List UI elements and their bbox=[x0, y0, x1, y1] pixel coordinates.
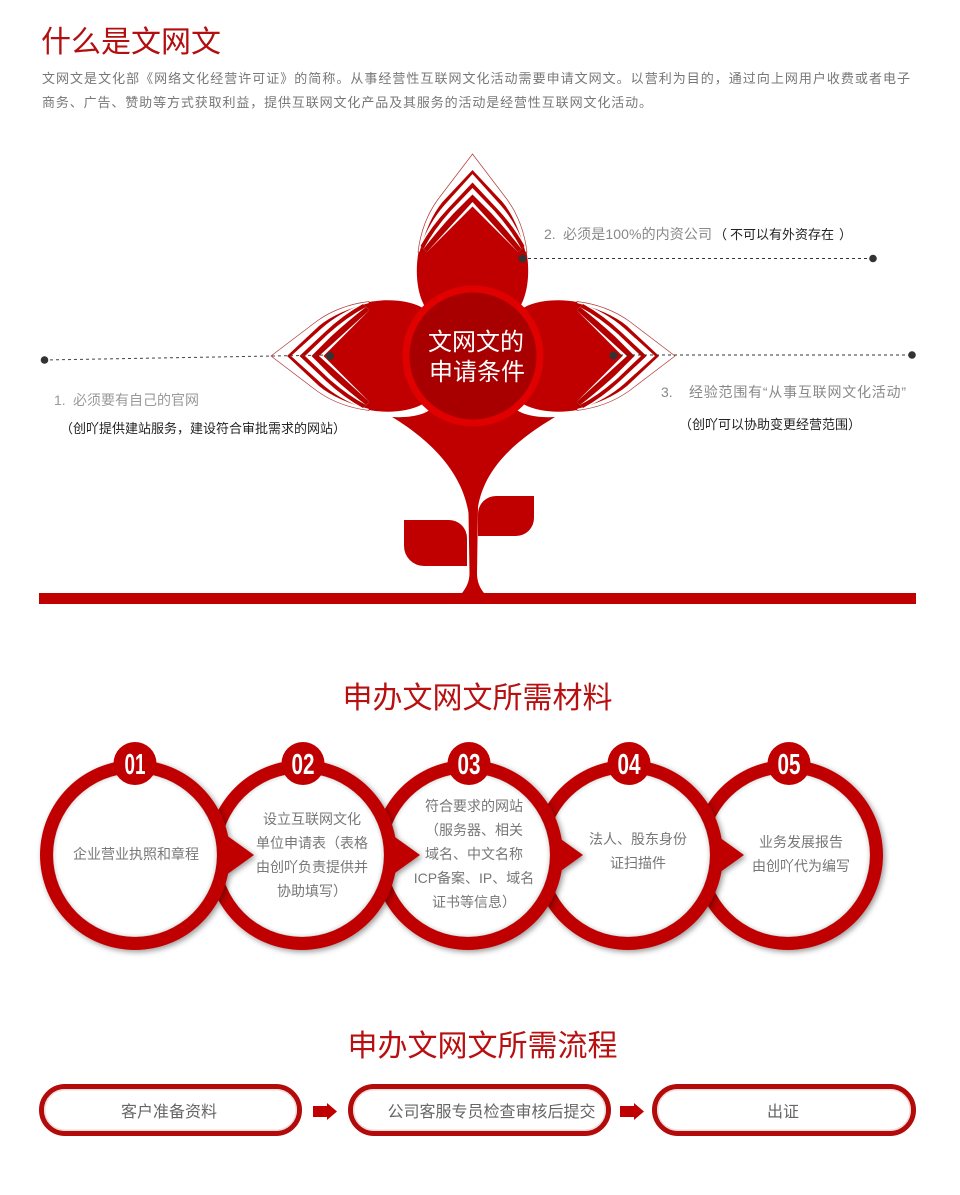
circle 05: 业务发展报告 bbox=[759, 834, 843, 850]
right petal bbox=[473, 300, 675, 412]
condition 2 text: 必须是100%的内资公司 bbox=[563, 226, 712, 242]
process step 1 bbox=[42, 1086, 300, 1134]
condition 1 text bbox=[54, 392, 346, 436]
circle 02: 由创吖负责提供并 bbox=[256, 859, 368, 875]
circle 04: 法人、股东身份 bbox=[589, 831, 687, 847]
process step 2: 公司客服专员检查审核后提交 bbox=[387, 1103, 596, 1121]
circle 01 bbox=[40, 742, 254, 950]
process step 1: 客户准备资料 bbox=[121, 1103, 217, 1121]
ground bar bbox=[39, 593, 916, 604]
condition 1 text: 1. bbox=[54, 392, 66, 408]
circle 05 bbox=[693, 742, 883, 950]
left petal bbox=[271, 300, 473, 412]
condition 1 text: （创吖提供建站服务，建设符合审批需求的网站） bbox=[60, 421, 346, 436]
condition 2 text bbox=[544, 226, 852, 242]
circle 01: 01 bbox=[124, 749, 146, 781]
circle 02: 设立互联网文化 bbox=[263, 811, 361, 827]
condition 3 text bbox=[661, 384, 906, 432]
condition 3 text: （创吖可以协助变更经营范围） bbox=[679, 417, 861, 432]
circle 04: 证扫描件 bbox=[610, 855, 666, 871]
callout 1 line bbox=[41, 352, 334, 364]
leaf right bbox=[478, 496, 534, 536]
circle 04 bbox=[533, 742, 744, 950]
condition 3 text: 经验范围有“从事互联网文化活动” bbox=[689, 384, 906, 400]
circle 05: 由创吖代为编写 bbox=[752, 858, 850, 874]
center circle: 申请条件 bbox=[429, 359, 525, 386]
circle 02: 协助填写） bbox=[277, 883, 347, 899]
center circle: 文网文的 bbox=[428, 329, 524, 356]
top petal bbox=[417, 154, 528, 356]
condition 2 text: 2. bbox=[544, 226, 556, 242]
callout 3 line bbox=[610, 351, 916, 360]
circle 03 bbox=[373, 742, 583, 950]
center circle bbox=[406, 289, 540, 423]
circle 02: 单位申请表（表格 bbox=[256, 835, 368, 851]
title: 什么是文网文 bbox=[41, 26, 221, 59]
circle 03: 域名、中文名称 bbox=[425, 846, 523, 862]
intro text: 文网文是文化部《网络文化经营许可证》的简称。从事经营性互联网文化活动需要申请文网文。以营利为目的，通过向上网用户收费或者电子 bbox=[42, 71, 910, 86]
flower diagram bbox=[39, 154, 916, 604]
circle 03: ICP备案、IP、域名 bbox=[414, 870, 534, 886]
flower stem bbox=[392, 408, 555, 593]
process step 3: 出证 bbox=[767, 1103, 799, 1121]
circle 05: 05 bbox=[778, 749, 800, 781]
process step 2 bbox=[350, 1086, 608, 1134]
condition 2 text: ） bbox=[839, 227, 852, 242]
arrow 2 bbox=[620, 1103, 644, 1120]
callout 2 line bbox=[518, 254, 877, 262]
arrow 1 bbox=[313, 1103, 337, 1120]
circle 03: 证书等信息） bbox=[432, 894, 516, 910]
process step 3 bbox=[654, 1086, 914, 1134]
circle 02: 02 bbox=[292, 749, 314, 781]
intro text: 商务、广告、赞助等方式获取利益，提供互联网文化产品及其服务的活动是经营性互联网文化活动。 bbox=[42, 95, 652, 110]
materials circles bbox=[40, 742, 883, 950]
condition 1 text: 必须要有自己的官网 bbox=[73, 392, 199, 408]
leaf left bbox=[404, 520, 467, 566]
intro text bbox=[42, 71, 910, 110]
heading: process: 申办文网文所需流程 bbox=[348, 1030, 618, 1063]
circle 03: 03 bbox=[458, 749, 480, 781]
circle 03: 符合要求的网站 bbox=[425, 798, 523, 814]
circle 04: 04 bbox=[618, 749, 640, 781]
condition 2 text: 不可以有外资存在 bbox=[730, 227, 834, 242]
heading: materials: 申办文网文所需材料 bbox=[342, 682, 612, 715]
circle 01: 企业营业执照和章程 bbox=[73, 846, 199, 862]
condition 2 text: （ bbox=[714, 227, 727, 242]
circle 03: （服务器、相关 bbox=[425, 822, 523, 838]
condition 3 text: 3. bbox=[661, 384, 673, 400]
circle 02 bbox=[207, 742, 420, 950]
